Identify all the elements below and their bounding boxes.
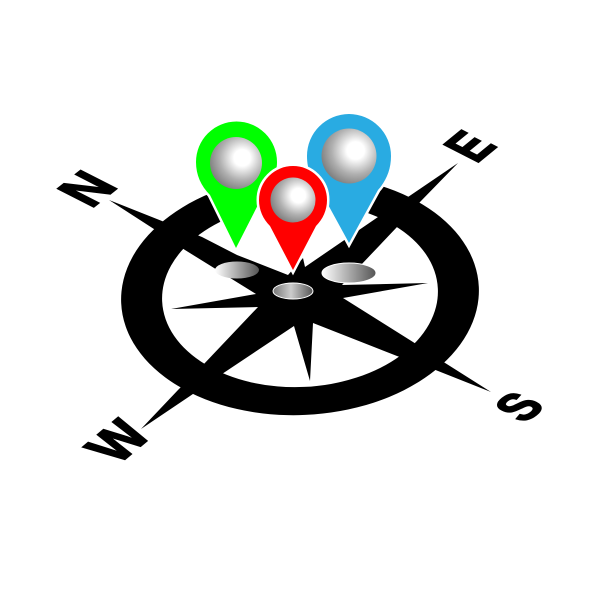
letter E: E	[431, 123, 509, 170]
letter W: W	[73, 412, 165, 471]
blue pin sphere	[322, 128, 376, 184]
compass ring	[116, 167, 484, 423]
green pin sphere	[210, 137, 262, 189]
pin shadow: red	[273, 283, 313, 299]
red pin sphere	[270, 178, 316, 222]
green map pin	[196, 122, 277, 248]
pin shadow: green	[215, 262, 259, 278]
eight-point star	[109, 163, 491, 429]
letter N: N	[45, 163, 131, 215]
compass rose	[109, 163, 491, 429]
blue map pin	[307, 114, 391, 243]
red map pin	[259, 166, 327, 270]
pin shadow: blue	[322, 263, 376, 283]
letter S: S	[482, 385, 557, 429]
